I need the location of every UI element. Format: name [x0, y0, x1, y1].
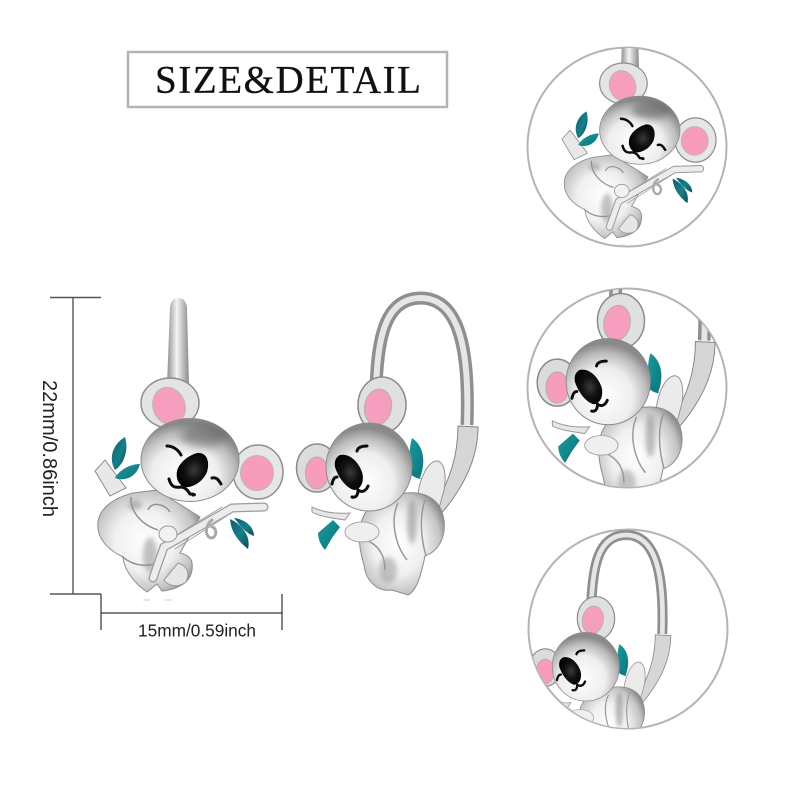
lever plate	[435, 426, 478, 515]
branch under head	[312, 507, 350, 520]
title box: SIZE&DETAIL	[128, 52, 447, 107]
title box: SIZE&DETAIL: SIZE&DETAIL	[155, 58, 421, 102]
left ear	[141, 378, 199, 429]
detail circle: front view	[526, 46, 728, 248]
leaves top left	[112, 437, 140, 479]
paw	[159, 526, 177, 542]
width dimension: 15mm/0.59inch	[101, 594, 282, 640]
detail circle: side view with hook	[528, 528, 728, 730]
height dimension: 22mm/0.86inch	[38, 298, 101, 594]
limb contours	[122, 497, 170, 565]
nose	[335, 455, 363, 490]
width dimension: 15mm/0.59inch: 15mm/0.59inch	[138, 620, 256, 640]
body	[359, 493, 444, 595]
eyes and mouth	[167, 446, 221, 495]
limb contours	[366, 500, 426, 570]
nose	[177, 453, 208, 487]
height dimension: 22mm/0.86inch: 22mm/0.86inch	[38, 380, 60, 517]
detail circle: side view	[526, 288, 728, 488]
leaf lower	[318, 520, 340, 550]
left ear	[296, 444, 338, 492]
earring: side view koala	[296, 298, 478, 595]
head	[141, 418, 239, 502]
back arm stub	[95, 460, 126, 496]
paw	[345, 522, 379, 542]
body shading	[128, 500, 187, 582]
reflection smudges	[143, 599, 172, 601]
head	[326, 423, 412, 511]
top ear	[358, 377, 406, 433]
lever back hook	[376, 298, 467, 425]
raised foot	[418, 461, 445, 512]
body shading	[379, 500, 417, 583]
leaf upper	[405, 438, 423, 479]
leaves bottom right	[230, 518, 254, 549]
right ear	[233, 445, 283, 499]
eyes and mouth	[332, 446, 368, 497]
earring: front view koala	[95, 298, 283, 600]
foot	[164, 563, 188, 586]
koala body	[98, 490, 200, 592]
hook	[167, 298, 189, 385]
branch	[153, 507, 264, 578]
